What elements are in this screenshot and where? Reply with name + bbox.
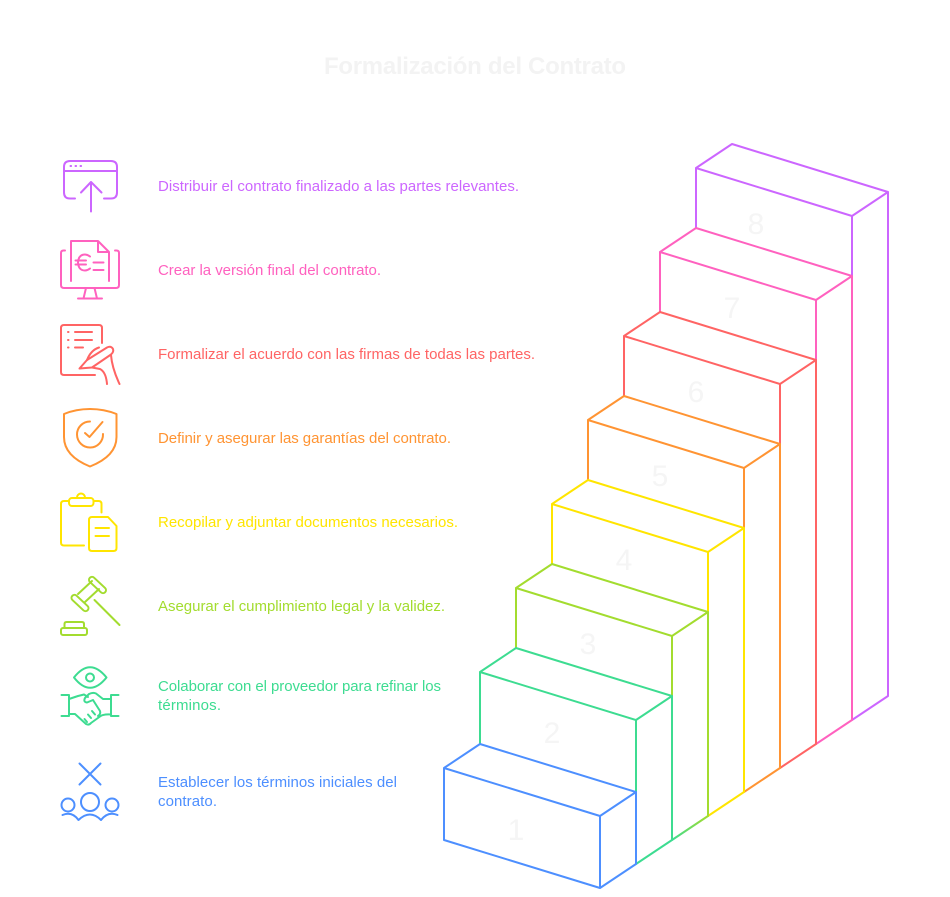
item 4: recopilar (61, 494, 458, 551)
step 4 (552, 480, 744, 816)
item 8: distribuir (64, 161, 519, 212)
step 1: 1 (508, 814, 524, 847)
icon: clipboard and document (61, 494, 116, 551)
step 8 (696, 144, 888, 720)
label: Recopilar y adjuntar documentos necesarios. (158, 514, 458, 531)
step 5 (588, 396, 780, 792)
label: Formalizar el acuerdo con las firmas de todas las partes. (158, 346, 535, 363)
step 7 (660, 228, 852, 744)
label: Establecer los términos iniciales del (158, 774, 397, 791)
icon: people and cross (62, 764, 118, 820)
label: Asegurar el cumplimiento legal y la validez. (158, 598, 445, 615)
step 4: 4 (616, 544, 632, 577)
step 2 (480, 648, 672, 864)
step 7: 7 (724, 292, 740, 325)
step 5: 5 (652, 460, 668, 493)
step 8: 8 (748, 208, 764, 241)
item 1: establecer (62, 764, 397, 820)
label: Distribuir el contrato finalizado a las partes relevantes. (158, 178, 519, 195)
title: Formalización del Contrato (324, 53, 626, 80)
item 2: colaborar (62, 667, 441, 725)
icon: shield with check (64, 409, 116, 466)
item 3: asegurar (61, 576, 445, 635)
icon: monitor with euro document (61, 241, 119, 298)
staircase chart (444, 144, 888, 888)
label: Colaborar con el proveedor para refinar los (158, 678, 441, 695)
step 3 (516, 564, 708, 840)
label line 2: términos. (158, 697, 221, 714)
step 1 (444, 744, 636, 888)
step 3: 3 (580, 628, 596, 661)
item 6: formalizar (61, 325, 535, 384)
label line 2: contrato. (158, 793, 217, 810)
item 7: crear (61, 241, 381, 298)
icon: browser upload (64, 161, 117, 212)
label: Crear la versión final del contrato. (158, 262, 381, 279)
step 6: 6 (688, 376, 704, 409)
label: Definir y asegurar las garantías del contrato. (158, 430, 451, 447)
step 6 (624, 312, 816, 768)
item 5: definir (64, 409, 451, 466)
icon: signing document (61, 325, 120, 384)
icon: gavel (61, 576, 120, 635)
icon: eye and handshake (62, 667, 118, 725)
step 2: 2 (544, 717, 560, 750)
